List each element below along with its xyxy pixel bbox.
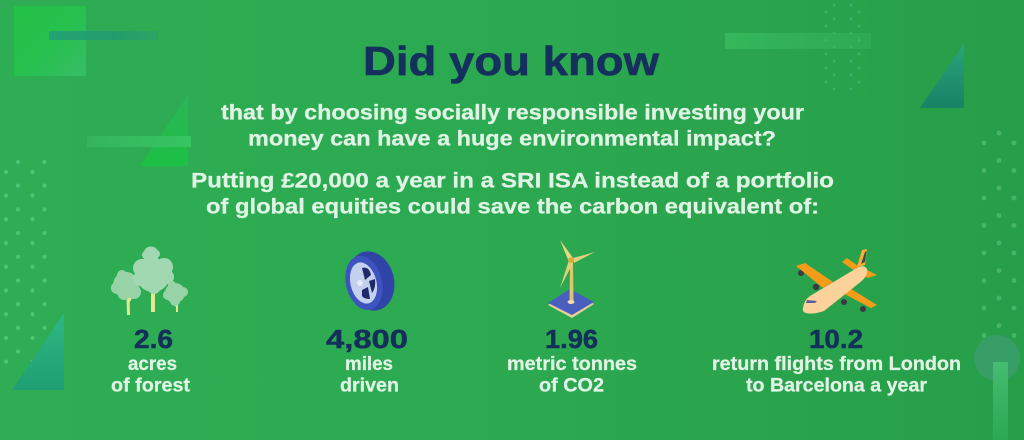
value: 1.96	[545, 324, 598, 354]
stat: flights	[712, 249, 961, 396]
icon: wind turbine	[548, 240, 595, 318]
intro text: money can have a huge environmental impact?	[248, 128, 776, 150]
value: 10.2	[809, 324, 863, 354]
label	[507, 354, 637, 396]
label	[712, 354, 961, 396]
label: return flights from London	[712, 354, 961, 375]
icon: tyre	[340, 246, 401, 316]
stat: miles	[326, 246, 408, 396]
stat: CO2	[507, 240, 637, 396]
icon: trees	[111, 246, 188, 315]
label: acres	[128, 354, 177, 375]
savings statement: Putting £20,000 a year in a SRI ISA instead of a portfolio	[191, 170, 834, 192]
title: Did you know	[363, 38, 659, 84]
intro text: that by choosing socially responsible investing your	[221, 102, 804, 124]
label: of forest	[111, 376, 191, 396]
label	[111, 354, 191, 396]
savings statement	[191, 170, 834, 218]
label: of CO2	[539, 376, 604, 396]
label: metric tonnes	[507, 354, 637, 375]
stat: forest	[111, 246, 191, 396]
savings statement: of global equities could save the carbon equivalent of:	[206, 196, 819, 218]
label: miles	[345, 354, 393, 375]
icon: aeroplane	[796, 249, 877, 314]
label: driven	[340, 376, 399, 396]
label: to Barcelona a year	[746, 376, 928, 396]
intro text	[221, 102, 804, 150]
label	[340, 354, 399, 396]
value: 2.6	[134, 324, 173, 354]
value: 4,800	[326, 324, 408, 354]
